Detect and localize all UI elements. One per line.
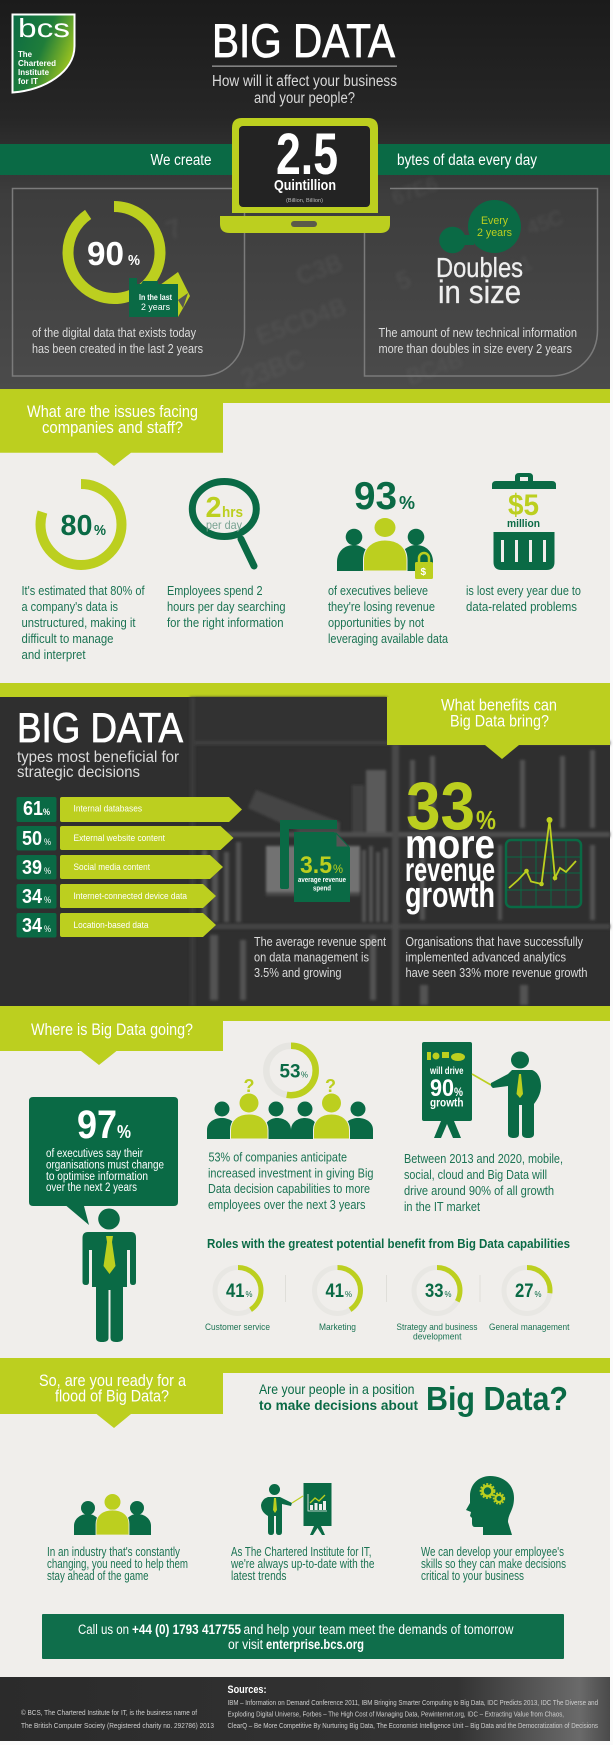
callout: 97 percent: % — [117, 1122, 131, 1142]
text: between 2013 and 2020 — [404, 1151, 563, 1214]
icon: presenter with board 90 percent: growth — [430, 1098, 464, 1110]
stat: 33 percent more revenue growth: 33 — [406, 768, 475, 844]
icon: businessman — [82, 1208, 136, 1342]
logo — [12, 13, 74, 92]
bar: device data 34 — [16, 884, 216, 908]
chart: 90 percent ring — [68, 206, 160, 298]
icon: folder in the last 2 years — [129, 272, 190, 317]
subtitle — [212, 73, 397, 107]
bar: device data 34: Internet-connected device data — [74, 891, 188, 902]
icon: every 2 years circles: Every — [481, 215, 508, 227]
text: employees search: Employees spend 2 — [167, 583, 262, 598]
text: develop skills: critical to your business — [421, 1569, 524, 1583]
icon: document 3.5 percent: average revenue — [298, 877, 346, 884]
panel: hero header: 45C — [524, 206, 566, 240]
text: up to date: we're always up-to-date with the — [230, 1557, 375, 1571]
chart: strategy 33: % — [444, 1290, 452, 1299]
heading: doubles in size: in size — [438, 274, 521, 310]
bar: device data 34: % — [44, 895, 51, 905]
text: digital data — [32, 326, 203, 356]
text: executives: leveraging available data — [328, 631, 449, 646]
text: up to date — [230, 1545, 375, 1583]
text: employees search: for the right information — [167, 615, 284, 630]
panel: hero header: 23BC — [237, 343, 308, 394]
heading: big data types — [17, 704, 183, 781]
bar: external website 50: 50 — [22, 828, 42, 850]
icon: team — [74, 1494, 151, 1535]
chart: marketing 41 — [314, 1268, 360, 1333]
bar: social media 39: 39 — [22, 857, 42, 879]
bar: location data 34: % — [44, 924, 51, 934]
text: lost every year: data-related problems — [466, 599, 577, 614]
text: ahead of the game: stay ahead of the game — [47, 1569, 149, 1583]
icon: document 3.5 percent: % — [333, 862, 343, 876]
text: executives: of executives believe — [328, 583, 428, 598]
text: ahead of the game: changing, you need to help them — [47, 1557, 188, 1571]
frame: right — [364, 188, 598, 376]
heading tab: going: Where is Big Data going? — [31, 1021, 193, 1039]
callout: call us: enterprise.bcs.org — [266, 1637, 364, 1652]
text: sources list — [228, 1700, 598, 1730]
icon: laptop: (Billion, Billion) — [286, 198, 323, 204]
text: executives: they're losing revenue — [328, 599, 435, 614]
heading tab: benefits: Big Data bring? — [450, 712, 549, 730]
icon: trash can five million — [492, 473, 556, 570]
text: 53 percent: Data decision capabilities to more — [208, 1181, 370, 1196]
chart: customer service 41: 41 — [226, 1281, 245, 1302]
heading tab: going — [0, 1021, 223, 1065]
bar: location data 34: Location-based data — [74, 920, 149, 931]
text: average revenue: The average revenue spent — [254, 934, 386, 949]
stat: 93 percent: 93 — [354, 475, 397, 518]
text: lost every year — [466, 583, 581, 614]
text: organisations — [406, 934, 588, 980]
heading: decisions about big data: Are your people in a position — [259, 1381, 414, 1397]
text: 53 percent: 53% of companies anticipate — [208, 1150, 347, 1164]
icon: magnifier 2 hrs per day: 2 — [206, 492, 222, 524]
text: executives — [328, 583, 449, 646]
icon: presenter with board 90 percent — [422, 1042, 541, 1138]
heading: decisions about big data: to make decisions about — [259, 1397, 418, 1413]
chart: 80 percent ring: 80 — [60, 510, 92, 542]
heading: decisions about big data: Big Data? — [426, 1380, 568, 1417]
text: technical information: more than doubles in size every 2 years — [378, 342, 572, 356]
panel: hero header: E5CD4B — [253, 293, 350, 351]
text: ahead of the game: In an industry that's constantly — [47, 1545, 181, 1559]
callout: 97 percent: 97 — [77, 1103, 117, 1147]
panel: benefits — [0, 683, 610, 1006]
bar: social media 39: Social media content — [74, 862, 150, 873]
text: average revenue: on data management is — [254, 950, 369, 964]
heading tab: issues — [0, 403, 223, 466]
callout: call us: +44 (0) 1793 417755 — [132, 1622, 241, 1637]
icon: every 2 years circles: 2 years — [477, 227, 512, 239]
text: between 2013 and 2020: Between 2013 and 2020, mobile, — [404, 1151, 563, 1166]
background: bookshelf — [190, 697, 610, 1006]
stat: 93 percent: % — [399, 493, 415, 513]
text: 80 percent unstructured: and interpret — [22, 647, 86, 662]
callout: 97 percent: to optimise information — [46, 1171, 148, 1183]
callout: call us: and help your team meet the demands of tomorrow — [244, 1622, 514, 1637]
chart: strategy 33: development — [413, 1332, 462, 1342]
text: develop skills — [421, 1545, 566, 1583]
callout: call us: Call us on — [78, 1622, 129, 1637]
panel: hero header: 9A1 — [494, 252, 535, 285]
chart: 53 percent ring — [266, 1046, 316, 1095]
icon: magnifier 2 hrs per day: per day — [206, 518, 242, 532]
bar: internal databases 61: 61 — [23, 798, 43, 820]
icon: document 3.5 percent: 3.5 — [300, 852, 332, 879]
logo: for IT — [18, 77, 38, 86]
text: 53 percent — [208, 1150, 374, 1212]
logo: The — [18, 50, 33, 59]
icon: three people with lock — [337, 518, 433, 579]
text: 80 percent unstructured: unstructured, making it — [22, 615, 136, 630]
chart: general management 27: % — [534, 1290, 542, 1299]
heading: doubles in size — [436, 252, 523, 310]
icon: magnifier 2 hrs per day: hrs — [222, 504, 243, 521]
bar: location data 34 — [16, 913, 216, 938]
chart: 80 percent ring — [40, 484, 122, 565]
text: employees search: hours per day searching — [167, 599, 286, 614]
text: 80 percent unstructured — [22, 583, 145, 662]
stat: 33 percent more revenue growth: more — [405, 821, 495, 867]
stat: 33 percent more revenue growth: revenue — [405, 851, 495, 888]
panel: footer — [0, 1677, 610, 1741]
icon: laptop: Quintillion — [274, 177, 336, 194]
chart: general management 27 — [489, 1268, 570, 1333]
text: ahead of the game — [47, 1545, 188, 1583]
text: sources list: Exploding Digital Universe, Forbes – The High Cost of Managing Data, Pewinternet.org, IDC – Extracting Value from Chaos, — [228, 1712, 564, 1718]
chart: 53 percent ring: % — [301, 1070, 308, 1080]
bar: internal databases 61: Internal databases — [74, 804, 142, 814]
text: lost every year: is lost every year due to — [466, 583, 581, 598]
text: 80 percent unstructured: It's estimated that 80% of — [22, 583, 145, 598]
icon: presenter with chart board — [261, 1483, 332, 1535]
text: employees search — [167, 583, 286, 630]
heading tab: benefits: What benefits can — [441, 696, 557, 714]
chart: marketing 41: % — [345, 1290, 352, 1299]
chart: revenue line — [506, 817, 581, 907]
heading tab: benefits — [387, 696, 610, 759]
stat: 33 percent more revenue growth: growth — [405, 874, 495, 915]
chart: strategy 33 — [396, 1268, 478, 1342]
text: organisations: Organisations that have successfully — [406, 934, 583, 949]
icon: presenter with board 90 percent: will drive — [429, 1066, 464, 1077]
text: develop skills: We can develop your employee's — [421, 1545, 564, 1559]
panel: where is big data going — [0, 1006, 610, 1358]
heading: big data types: BIG DATA — [17, 704, 183, 751]
text: digital data: of the digital data that exists today — [32, 326, 197, 340]
stat: 33 percent more revenue growth — [405, 768, 496, 915]
band text: we create: We create — [150, 152, 212, 169]
stat: 33 percent more revenue growth: % — [476, 805, 496, 835]
bar: social media 39 — [16, 855, 223, 880]
band text: bytes of data: bytes of data every day — [397, 152, 537, 169]
icon: crowd with question marks: ? — [244, 1076, 254, 1096]
icon: presenter with board 90 percent: % — [454, 1085, 463, 1099]
text: between 2013 and 2020: social, cloud and Big Data will — [404, 1167, 547, 1182]
panel: hero header: 5 — [393, 266, 415, 296]
callout: 97 percent: of executives say their — [46, 1148, 143, 1160]
chart: strategy 33: Strategy and business — [396, 1322, 478, 1333]
text: executives: opportunities by not — [328, 615, 424, 630]
chart: customer service 41: % — [246, 1290, 252, 1299]
logo: Institute — [18, 68, 50, 77]
text: copyright — [21, 1708, 214, 1730]
callout: 97 percent: over the next 2 years — [46, 1182, 137, 1194]
icon: crowd with question marks: ? — [325, 1076, 336, 1096]
chart: 80 percent ring: % — [94, 523, 106, 539]
chart: general management 27: General management — [489, 1322, 570, 1333]
heading: sources: Sources: — [228, 1684, 266, 1696]
icon: magnifier 2 hrs per day — [192, 482, 256, 566]
icon: folder in the last 2 years: In the last — [139, 292, 172, 302]
logo: Chartered — [18, 59, 56, 68]
chart: general management 27: 27 — [515, 1281, 534, 1302]
icon: three people with lock: $ — [420, 567, 426, 578]
chart: 90 percent ring: 90 — [87, 235, 124, 272]
text: technical information — [378, 326, 577, 356]
text: average revenue — [254, 934, 386, 980]
icon: presenter with board 90 percent: 90 — [430, 1075, 454, 1102]
text: up to date: As The Chartered Institute for IT, — [231, 1545, 372, 1559]
heading tab: flood: flood of Big Data? — [55, 1388, 169, 1406]
panel: hero header: C3B — [293, 249, 346, 291]
title: BIG DATA — [212, 14, 396, 67]
green band — [0, 144, 610, 175]
panel: hero header: 67E6 — [389, 173, 441, 210]
text: 80 percent unstructured: difficult to manage — [22, 631, 114, 646]
heading tab: flood — [0, 1372, 223, 1428]
callout: call us — [42, 1614, 564, 1659]
icon: folder in the last 2 years: 2 years — [141, 302, 170, 313]
callout: call us: or visit — [228, 1637, 263, 1652]
bar: external website 50 — [16, 826, 234, 850]
panel: hero header: 7 — [162, 212, 186, 246]
chart: marketing 41: Marketing — [319, 1322, 356, 1333]
chart: customer service 41 — [205, 1268, 270, 1333]
heading tab: issues: companies and staff? — [42, 419, 183, 437]
text: copyright: The British Computer Society (Registered charity no. 292786) 2013 — [21, 1721, 214, 1730]
heading tab: issues: What are the issues facing — [27, 403, 198, 421]
panel: ready for a flood — [0, 1358, 610, 1677]
panel: issues — [0, 389, 610, 683]
text: develop skills: skills so they can make decisions — [421, 1557, 566, 1571]
icon: head with gears — [466, 1476, 514, 1535]
panel: hero header: BC4B — [403, 347, 466, 390]
bar: internal databases 61 — [16, 797, 242, 822]
text: technical information: The amount of new technical information — [378, 326, 577, 340]
text: average revenue: 3.5% and growing — [254, 965, 342, 980]
heading: big data types: types most beneficial for — [17, 749, 180, 766]
chart: strategy 33: 33 — [425, 1281, 444, 1302]
bar: social media 39: % — [44, 866, 51, 876]
subtitle: How will it affect your business — [212, 73, 397, 90]
bar: location data 34: 34 — [22, 915, 43, 937]
bar: external website 50: External website content — [74, 833, 165, 844]
bar: internal databases 61: % — [43, 807, 50, 817]
chart: marketing 41: 41 — [326, 1281, 344, 1302]
logo: bcs — [18, 13, 70, 43]
heading: big data types: strategic decisions — [17, 764, 140, 781]
bar: external website 50: % — [44, 837, 51, 847]
text: 53 percent: employees over the next 3 years — [208, 1197, 366, 1212]
callout: 97 percent — [29, 1097, 178, 1225]
chart: customer service 41: Customer service — [205, 1322, 270, 1333]
text: organisations: implemented advanced analytics — [406, 950, 566, 964]
heading: decisions about big data — [259, 1380, 568, 1417]
text: 80 percent unstructured: a company's data is — [22, 599, 118, 614]
frame: left — [12, 188, 244, 376]
icon: laptop: 2.5 — [276, 122, 338, 187]
bar: device data 34: 34 — [22, 886, 43, 908]
heading: doubles in size: Doubles — [436, 252, 523, 283]
icon: trash can five million: million — [507, 518, 540, 530]
subtitle: and your people? — [254, 90, 355, 107]
chart: 53 percent ring: 53 — [280, 1062, 300, 1082]
icon: trash can five million: $5 — [508, 489, 539, 522]
text: between 2013 and 2020: drive around 90% of all growth — [404, 1183, 554, 1198]
text: between 2013 and 2020: in the IT market — [404, 1199, 480, 1214]
text: digital data: has been created in the last 2 years — [32, 342, 203, 356]
text: copyright: © BCS, The Chartered Institute for IT, is the business name of — [21, 1708, 198, 1717]
callout: 97 percent: organisations must change — [46, 1160, 164, 1172]
icon: document 3.5 percent: spend — [313, 886, 331, 892]
heading: roles: Roles with the greatest potential benefit from Big Data capabilities — [207, 1237, 570, 1251]
panel: hero header — [0, 0, 610, 394]
text: 53 percent: increased investment in giving Big — [208, 1166, 374, 1180]
text: up to date: latest trends — [231, 1569, 286, 1583]
heading tab: flood: So, are you ready for a — [39, 1372, 187, 1390]
chart: 90 percent ring: % — [128, 252, 140, 269]
icon: every 2 years circles — [439, 200, 521, 253]
icon: laptop — [220, 118, 390, 233]
icon: crowd with question marks — [207, 1076, 373, 1139]
icon: document 3.5 percent — [280, 820, 350, 902]
